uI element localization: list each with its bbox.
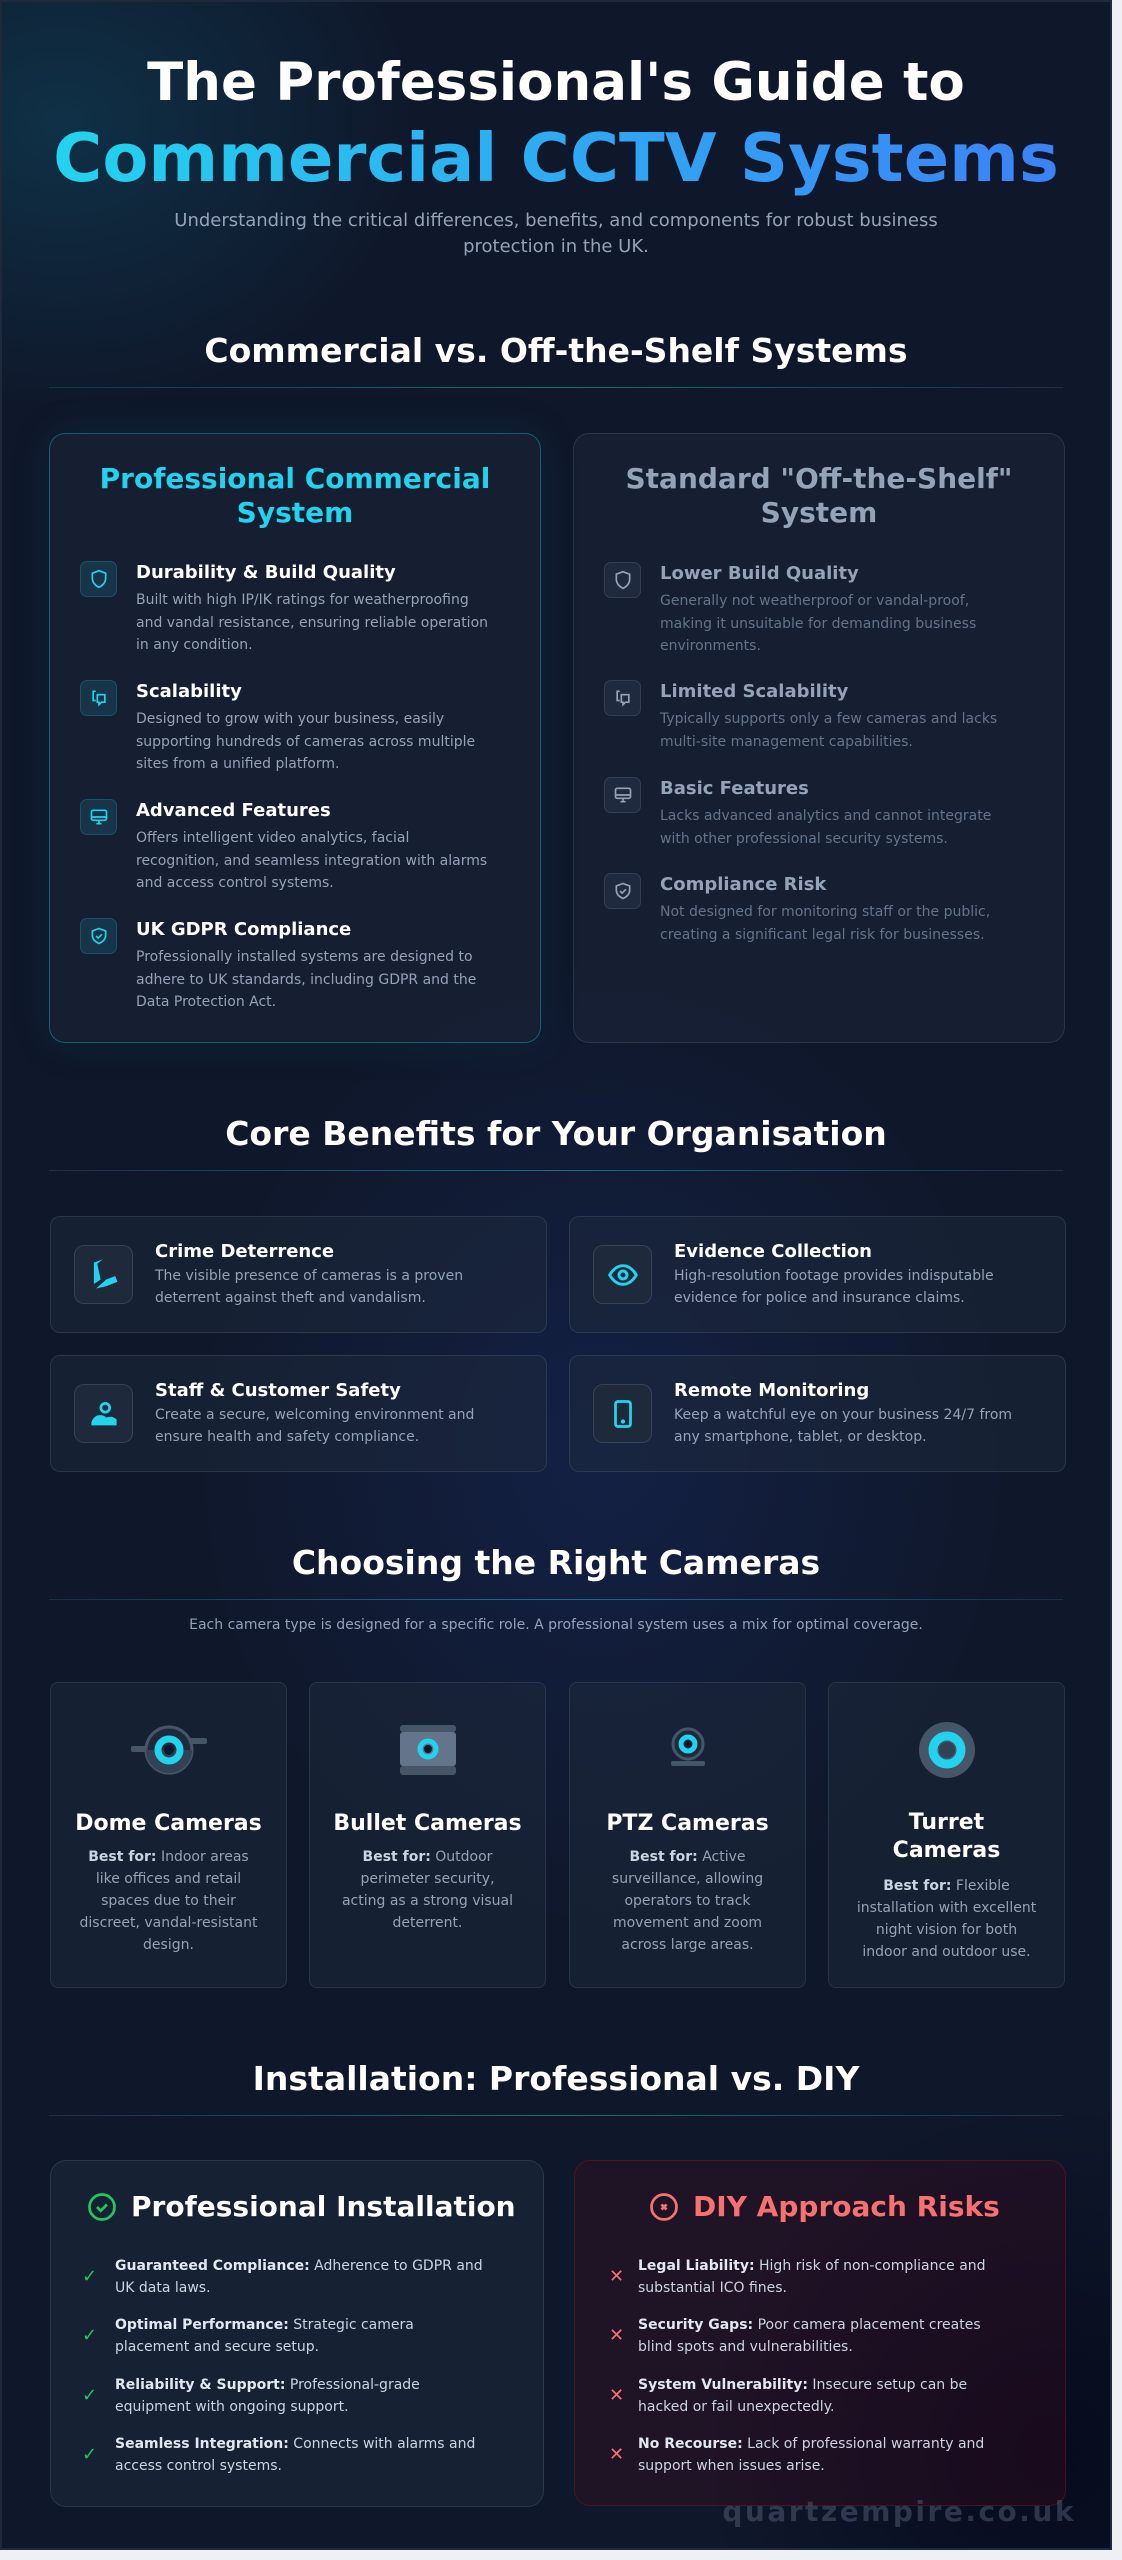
panel: professional installation: UK data laws. [115,2280,211,2296]
item: scalability: Designed to grow with your business, easily [136,711,444,727]
panel: professional installation: ✓ [82,2266,97,2287]
camera card: bullet: acting as a strong visual [342,1893,513,1909]
item: lower build quality [660,563,976,654]
panel: professional installation: Guaranteed Compliance: Adherence to GDPR and [115,2258,483,2274]
panel: professional installation: access control systems. [115,2458,282,2474]
camera card: ptz [569,1682,806,1988]
benefit: crime deterrence [50,1216,547,1333]
icon: dome camera [131,1726,207,1774]
panel: professional installation: ✓ [82,2444,97,2465]
item: basic features: Lacks advanced analytics and cannot integrate [660,808,991,824]
panel: diy risks: System Vulnerability: Insecure setup can be [638,2377,967,2393]
benefit: evidence collection: High-resolution footage provides indisputable [674,1268,994,1284]
subtitle [174,210,938,257]
benefit: crime deterrence: deterrent against theft and vandalism. [155,1290,426,1306]
camera card: bullet: deterrent. [392,1915,462,1931]
camera card: ptz: surveillance, allowing [612,1871,763,1887]
card heading with check icon: Professional Installation [131,2190,516,2223]
item: durability [136,562,488,653]
panel: diy risks: Security Gaps: Poor camera placement creates [638,2317,981,2333]
card heading with x icon: DIY Approach Risks [693,2190,1000,2223]
item: limited scalability: Typically supports only a few cameras and lacks [660,711,997,727]
heading: choosing cameras: Choosing the Right Cameras [292,1543,820,1582]
camera card: bullet: perimeter security, [360,1871,495,1887]
item: durability: in any condition. [136,637,253,653]
card title: System [761,496,877,529]
benefit: crime deterrence: Crime Deterrence [155,1241,334,1262]
benefit: staff safety: Create a secure, welcoming environment and [155,1407,474,1423]
item: compliance risk: Compliance Risk [660,874,826,895]
item: gdpr: Professionally installed systems are designed to [136,949,473,965]
icon: shield [604,562,641,598]
camera card: turret: Cameras [893,1838,1000,1863]
panel: professional installation: Seamless Integration: Connects with alarms and [115,2436,475,2452]
item: durability: Durability & Build Quality [136,562,396,583]
item: scalability [136,681,475,772]
panel: diy risks: Legal Liability: High risk of non-compliance and [638,2258,986,2274]
panel: diy risks: ✕ [609,2385,624,2406]
list item [609,2258,986,2474]
panel: professional installation: ✓ [82,2325,97,2346]
title: The Professional's Guide to [147,52,965,113]
item: lower build quality: environments. [660,638,761,654]
camera card: turret: night vision for both [876,1922,1017,1938]
camera card: turret: installation with excellent [857,1900,1036,1916]
item: basic features: Basic Features [660,778,809,799]
benefit: staff safety: Staff & Customer Safety [155,1380,401,1401]
benefit: remote monitoring [569,1355,1066,1472]
item: compliance risk: Not designed for monitoring staff or the public, [660,904,990,920]
icon: eye [593,1245,652,1304]
benefit: evidence collection [569,1216,1066,1333]
card title: Professional Commercial [100,462,490,495]
item: durability: and vandal resistance, ensuring reliable operation [136,614,488,630]
item: limited scalability: Limited Scalability [660,681,848,702]
icon: phone [593,1384,652,1443]
icon: turret camera [919,1722,975,1778]
camera card: ptz: operators to track [624,1893,751,1909]
icon: shield check [80,918,117,954]
watermark: quartzempire.co.uk [722,2495,1076,2528]
camera card: dome: spaces due to their [101,1893,236,1909]
icon: camera [74,1245,133,1304]
camera card: turret: indoor and outdoor use. [862,1944,1031,1960]
panel: off-the-shelf system [573,433,1065,1043]
camera card: ptz: movement and zoom [613,1915,762,1931]
panel: professional installation: Reliability & Support: Professional-grade [115,2377,420,2393]
benefit: evidence collection: Evidence Collection [674,1241,872,1262]
item: gdpr: Data Protection Act. [136,994,276,1010]
panel: diy risks: hacked or fail unexpectedly. [638,2399,834,2415]
item: advanced features: Advanced Features [136,800,331,821]
camera card: bullet: Best for: Outdoor [363,1849,492,1865]
item: lower build quality: making it unsuitable for demanding business [660,616,976,632]
panel: diy risks: ✕ [609,2444,624,2465]
heading: installation: Installation: Professional vs. DIY [253,2059,859,2098]
camera card: dome: design. [143,1937,194,1953]
item: advanced features: and access control systems. [136,875,334,891]
camera card: dome: Dome Cameras [75,1811,262,1836]
icon: ptz camera [671,1728,705,1766]
benefit: remote monitoring: any smartphone, tablet, or desktop. [674,1429,927,1445]
card title [626,462,1012,529]
benefit: remote monitoring: Remote Monitoring [674,1380,869,1401]
benefit: crime deterrence: The visible presence of cameras is a proven [155,1268,463,1284]
panel: diy risks: blind spots and vulnerabilities. [638,2339,853,2355]
camera card: dome: like offices and retail [96,1871,241,1887]
item: limited scalability: multi-site management capabilities. [660,734,913,750]
benefit: staff safety: ensure health and safety compliance. [155,1429,419,1445]
camera card: ptz: across large areas. [621,1937,754,1953]
icon: monitor [80,799,117,835]
heading: commercial vs off-the-shelf: Commercial vs. Off-the-Shelf Systems [204,331,908,370]
camera card: turret: Turret [909,1810,984,1835]
camera card: dome: discreet, vandal-resistant [80,1915,257,1931]
panel: diy risks: substantial ICO fines. [638,2280,787,2296]
panel: professional commercial system [49,433,541,1043]
subtitle: Understanding the critical differences, benefits, and components for robust business [174,210,938,231]
camera card: bullet [309,1682,546,1988]
item: scalability: Scalability [136,681,242,702]
panel: professional installation [50,2160,544,2507]
item: gdpr: UK GDPR Compliance [136,919,351,940]
camera card: turret [828,1682,1065,1988]
panel: professional installation: equipment with ongoing support. [115,2399,349,2415]
item: limited scalability [660,681,997,750]
heading: core benefits: Core Benefits for Your Organisation [225,1114,887,1153]
title: Commercial CCTV Systems [53,119,1059,197]
icon: scalability [80,680,117,716]
card title [100,462,490,529]
panel: professional installation: placement and secure setup. [115,2339,319,2355]
item: lower build quality: Generally not weatherproof or vandal-proof, [660,593,969,609]
cameras intro text: Each camera type is designed for a specific role. A professional system uses a mix for optimal coverage. [189,1617,923,1633]
icon: scalability [604,680,641,716]
camera card: dome: Best for: Indoor areas [88,1849,249,1865]
icon: monitor [604,777,641,813]
panel: diy risks: ✕ [609,2325,624,2346]
panel: diy risks [574,2160,1066,2506]
benefit: staff safety [50,1355,547,1472]
item: scalability: supporting hundreds of cameras across multiple [136,734,475,750]
item: durability: Built with high IP/IK ratings for weatherproofing [136,592,469,608]
camera card: ptz: Best for: Active [629,1849,746,1865]
item: gdpr: adhere to UK standards, including GDPR and the [136,972,476,988]
item: gdpr [136,919,476,1010]
icon: shield check [604,873,641,909]
panel: diy risks: No Recourse: Lack of professional warranty and [638,2436,984,2452]
camera card: turret: Best for: Flexible [883,1878,1010,1894]
camera card: bullet: Bullet Cameras [333,1811,522,1836]
item: basic features [660,778,991,846]
item: scalability: sites from a unified platform. [136,756,339,772]
benefit: remote monitoring: Keep a watchful eye on your business 24/7 from [674,1407,1012,1423]
camera card: dome [50,1682,287,1988]
icon: shield [80,561,117,597]
item: advanced features: recognition, and seamless integration with alarms [136,852,487,868]
subtitle: protection in the UK. [463,236,649,257]
list item [82,2258,483,2474]
camera card: ptz: PTZ Cameras [606,1811,769,1836]
item: compliance risk [660,874,990,942]
panel: diy risks: support when issues arise. [638,2458,825,2474]
icon: bullet camera [400,1725,456,1775]
item: basic features: with other professional security systems. [660,830,948,846]
card title: System [237,496,353,529]
item: advanced features [136,800,487,891]
panel: professional installation: ✓ [82,2385,97,2406]
benefit: evidence collection: evidence for police and insurance claims. [674,1290,965,1306]
panel: diy risks: ✕ [609,2266,624,2287]
card title: Standard "Off-the-Shelf" [626,462,1012,495]
title [53,52,1059,197]
item: advanced features: Offers intelligent video analytics, facial [136,830,409,846]
item: compliance risk: creating a significant legal risk for businesses. [660,926,985,942]
panel: professional installation: Optimal Performance: Strategic camera [115,2317,414,2333]
item: lower build quality: Lower Build Quality [660,563,859,584]
icon: person [74,1384,133,1443]
